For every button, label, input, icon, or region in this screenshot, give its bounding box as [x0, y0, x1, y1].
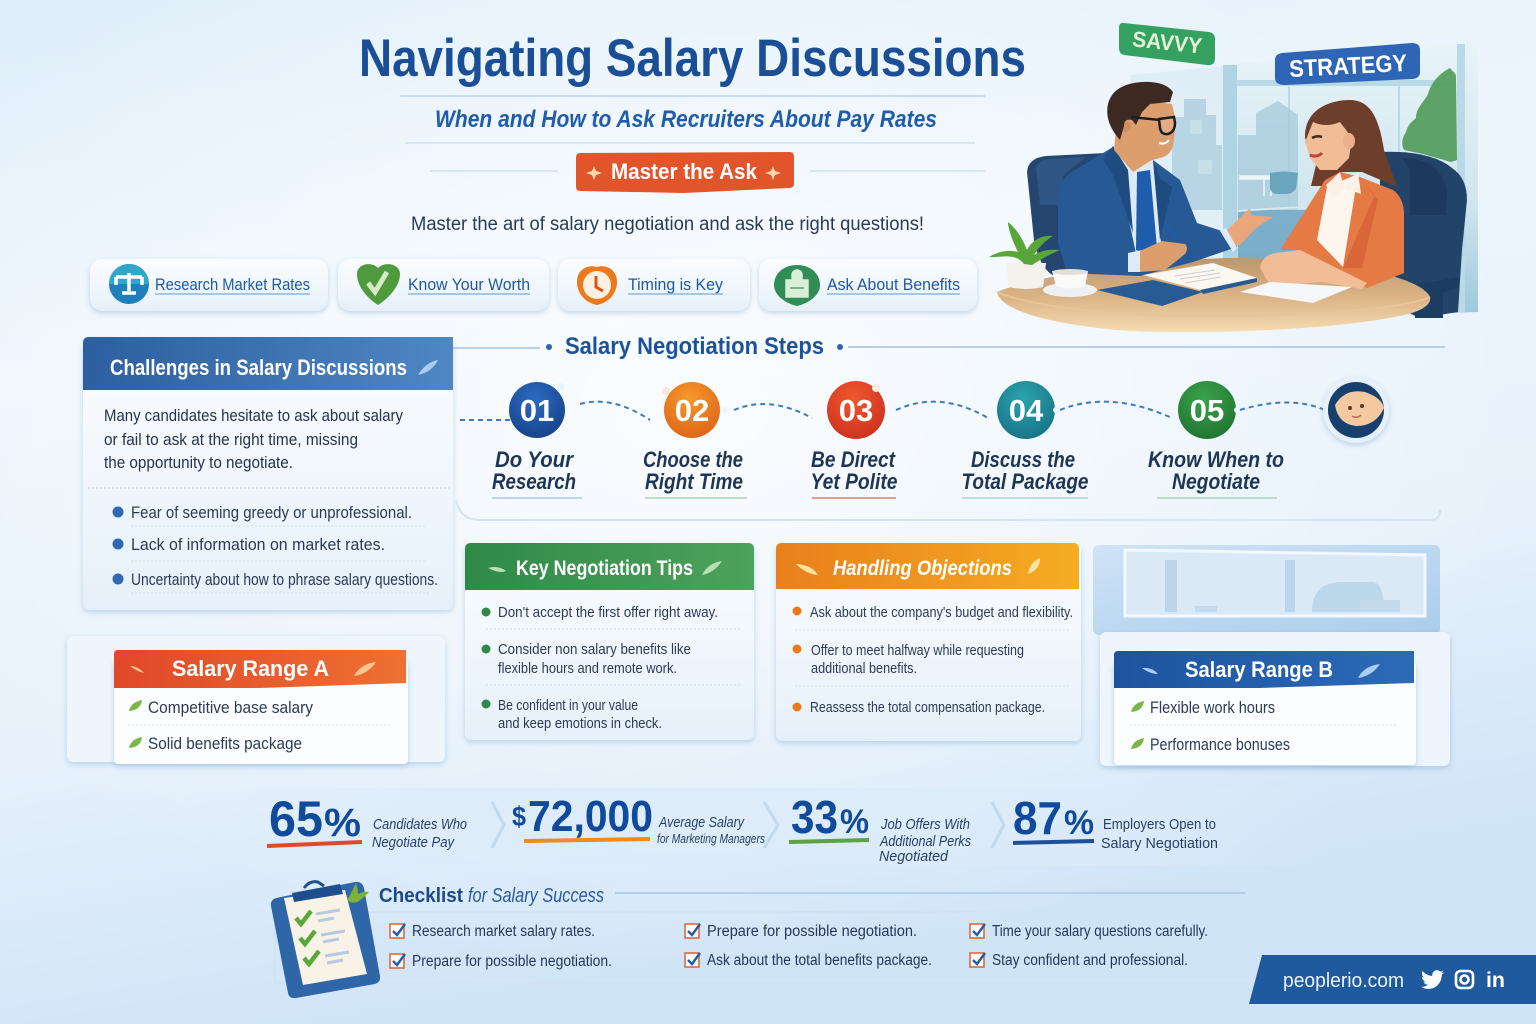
chip: Ask About Benefits [759, 259, 977, 311]
bullet list: objections: Offer to meet halfway while requesting [811, 642, 1024, 659]
step 01: Do Your [495, 447, 574, 472]
tag: STRATEGY: STRATEGY [1289, 50, 1408, 83]
checklist items: Ask about the total benefits package. [707, 952, 932, 969]
panel: Key Negotiation Tips [465, 543, 754, 740]
step 01 [492, 382, 582, 498]
step 01: 01 [520, 393, 554, 428]
step 03: Yet Polite [810, 469, 898, 494]
checklist items: Stay confident and professional. [992, 952, 1188, 969]
title: Navigating Salary Discussions [359, 29, 1026, 88]
stat: 87%: Employers Open to [1103, 816, 1216, 833]
step 02: 02 [675, 393, 709, 428]
bullet list: objections: additional benefits. [811, 660, 917, 677]
step 03 [810, 381, 898, 498]
stat: 33%: Negotiated [879, 848, 949, 865]
icon: gift bag [774, 265, 820, 306]
step 03: Be Direct [811, 447, 896, 472]
stat: 87%: 87 [1013, 792, 1062, 844]
panel: Salary Range B [1100, 632, 1450, 766]
steps panel outline [456, 500, 1440, 520]
icon: smiling face [1323, 377, 1389, 443]
panel heading: objections [776, 543, 1079, 589]
heading: checklist: for Salary Success [468, 885, 604, 907]
list: range B: Flexible work hours [1150, 698, 1275, 717]
steps: connectors [460, 402, 1325, 420]
bullet list: challenges: Uncertainty about how to phrase salary questions. [131, 571, 438, 589]
step 04 [962, 381, 1088, 498]
stat: 33%: 33 [791, 791, 838, 843]
panel heading: range B: Salary Range B [1185, 657, 1333, 682]
plant [989, 222, 1060, 289]
text: intro: or fail to ask at the right time, missing [104, 431, 358, 449]
step 03: 03 [839, 393, 873, 428]
table [997, 258, 1430, 332]
step 05 [1148, 381, 1284, 498]
checklist items: Time your salary questions carefully. [992, 923, 1208, 940]
tagline: Master the art of salary negotiation and ask the right questions! [411, 214, 924, 235]
stat: 65%: Candidates Who [373, 816, 467, 833]
stat: $72,000: 72,000 [528, 792, 653, 841]
checklist items: Prepare for possible negotiation. [707, 923, 917, 940]
stat: $72,000: Average Salary [658, 814, 745, 831]
icon: scales [109, 264, 149, 304]
step 02: Choose the [643, 447, 743, 472]
bullet list: challenges: Lack of information on market rates. [131, 536, 385, 554]
panel heading: tips [465, 543, 754, 590]
badge: Master the Ask: Master the Ask [611, 159, 758, 184]
stat: 33% [789, 791, 971, 865]
panel heading: challenges: Challenges in Salary Discussions [110, 355, 407, 380]
checklist items: Research market salary rates. [412, 923, 595, 940]
checklist items: Prepare for possible negotiation. [412, 953, 612, 970]
image: office window strip [1093, 545, 1440, 635]
footer bar: peoplerio.com [1283, 970, 1404, 992]
heading: Salary Negotiation Steps [453, 333, 1445, 360]
badge: Master the Ask [430, 152, 985, 193]
icon: instagram [1456, 971, 1473, 988]
stat: 65%: Negotiate Pay [372, 834, 455, 851]
step 05: Know When to [1148, 447, 1284, 472]
bullet list: objections: Reassess the total compensation package. [810, 699, 1045, 716]
bullet list: tips: Don't accept the first offer right away. [498, 604, 718, 621]
stat: 33%: % [840, 803, 869, 841]
step 04: 04 [1009, 393, 1044, 428]
panel: Handling Objections [776, 543, 1081, 741]
footer bar [1249, 955, 1536, 1004]
stat: 65% [267, 791, 467, 851]
step 04: Discuss the [971, 447, 1075, 472]
stat: $72,000: $ [512, 801, 526, 832]
panel: checklist [274, 885, 1250, 983]
bullet list: tips [482, 604, 740, 732]
stat: 65%: 65 [269, 791, 323, 847]
text: intro: Many candidates hesitate to ask about salary [104, 407, 404, 425]
panel heading: challenges [83, 337, 453, 390]
heading: Salary Negotiation Steps: Salary Negotiation Steps [565, 333, 824, 360]
chip: Know Your Worth [338, 259, 549, 311]
bullet list: objections: Ask about the company's budget and flexibility. [810, 604, 1073, 621]
chip: Timing is Key: Timing is Key [628, 275, 723, 294]
text: intro: the opportunity to negotiate. [104, 454, 293, 472]
illustration: two people at a table [989, 43, 1478, 332]
stat: 65%: % [324, 801, 361, 845]
bullet list: tips: Be confident in your value [498, 697, 638, 714]
bullet list: tips: flexible hours and remote work. [498, 660, 677, 677]
stat: 33%: Additional Perks [879, 833, 971, 850]
stat: $72,000: for Marketing Managers [657, 832, 765, 846]
subtitle: When and How to Ask Recruiters About Pay Rates [435, 106, 937, 133]
chip: Research Market Rates [90, 259, 328, 311]
panel: Salary Range A [67, 636, 445, 764]
list: range B: Performance bonuses [1150, 735, 1290, 754]
panel heading: objections: Handling Objections [833, 557, 1012, 580]
icon: twitter [1421, 970, 1444, 989]
checklist items [390, 923, 1208, 970]
woman's chair [1380, 152, 1467, 318]
stat: 87%: % [1064, 804, 1094, 842]
list: range B [1130, 698, 1398, 754]
list: range A [128, 698, 392, 753]
chip: Ask About Benefits: Ask About Benefits [827, 275, 960, 294]
tag: SAVVY [1119, 23, 1215, 65]
step 05: 05 [1190, 393, 1224, 428]
panel heading: range A [114, 650, 406, 688]
man [1058, 82, 1273, 276]
panel: challenges [83, 337, 453, 610]
window backdrop [1130, 43, 1478, 314]
icon: heart check [357, 264, 400, 305]
chip: Know Your Worth: Know Your Worth [408, 275, 530, 294]
icon: linkedin: in [1486, 969, 1505, 992]
man's chair [1027, 153, 1110, 277]
stat: 33%: Job Offers With [880, 816, 970, 833]
woman [1260, 100, 1404, 289]
chip: Research Market Rates: Research Market Rates [155, 275, 310, 294]
icon: clock [577, 266, 617, 305]
bullet list: challenges [112, 504, 438, 593]
heading: checklist [379, 885, 604, 907]
panel heading: range B [1114, 651, 1414, 688]
list: range A: Competitive base salary [148, 698, 313, 717]
step 04: Total Package [962, 469, 1088, 494]
text: intro [104, 407, 404, 472]
list: range A: Solid benefits package [148, 734, 302, 753]
step 01: Research [492, 469, 576, 494]
stat: 87% [1013, 792, 1218, 852]
step 05: Negotiate [1172, 469, 1260, 494]
stat: $72,000 [512, 792, 765, 846]
cup and saucer [1043, 269, 1097, 297]
bullet list: objections [792, 604, 1073, 716]
bullet list: tips: Consider non salary benefits like [498, 641, 691, 658]
step 02: Right Time [645, 469, 743, 494]
tag: SAVVY: SAVVY [1131, 26, 1204, 59]
bullet list: tips: and keep emotions in check. [498, 715, 662, 732]
icon: clipboard [271, 882, 380, 998]
bullet list: challenges: Fear of seeming greedy or unprofessional. [131, 504, 412, 522]
folder and papers [1097, 263, 1352, 306]
stats band [210, 788, 1330, 866]
step 02 [643, 382, 747, 498]
heading: checklist: Checklist [379, 885, 463, 907]
panel heading: tips: Key Negotiation Tips [516, 557, 693, 580]
panel heading: range A: Salary Range A [172, 656, 329, 681]
stat: 87%: Salary Negotiation [1101, 835, 1218, 852]
chip: Timing is Key [558, 259, 750, 311]
